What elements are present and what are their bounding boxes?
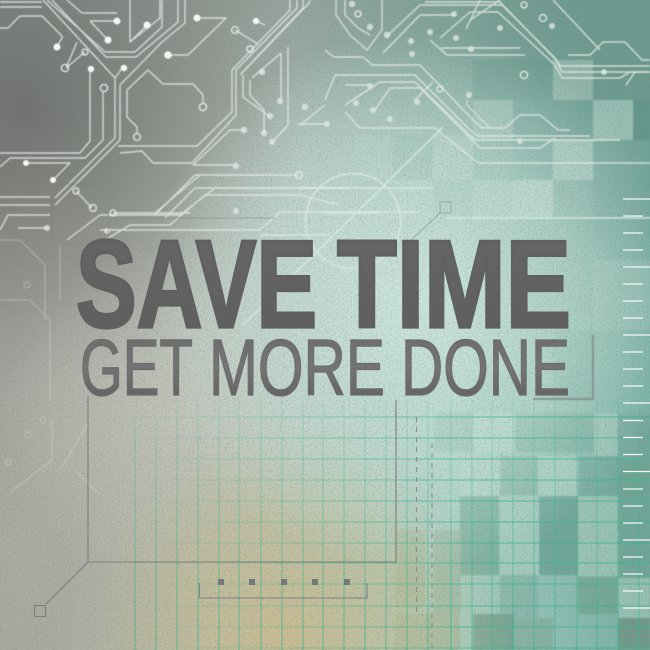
faded traces at left edge [0, 240, 100, 495]
bracket with five square markers [200, 579, 367, 598]
upper-left thin frame [52, 184, 275, 240]
circuit nodes: solid dots [23, 14, 259, 183]
lower wireframe panel and connector [34, 396, 396, 616]
white ruler ticks at right edge [623, 199, 650, 608]
subtitle: MORE [209, 323, 385, 412]
title [76, 216, 571, 354]
title: TIME [337, 216, 571, 354]
dashed vertical guides [416, 417, 432, 650]
subtitle: GET [80, 323, 193, 412]
circle and diagonal guide lines [243, 127, 650, 325]
mosaic of teal squares [315, 60, 650, 650]
teal measurement grid [120, 400, 650, 650]
circuit nodes: faded dots [44, 1, 607, 234]
subtitle: DONE [401, 323, 570, 412]
corner bracket behind the subtitle [533, 335, 593, 399]
circuit nodes: rings [61, 2, 547, 216]
subtitle [80, 323, 570, 412]
small square node with connector [410, 202, 451, 241]
circuit board traces [0, 0, 650, 240]
title: SAVE [76, 216, 317, 354]
